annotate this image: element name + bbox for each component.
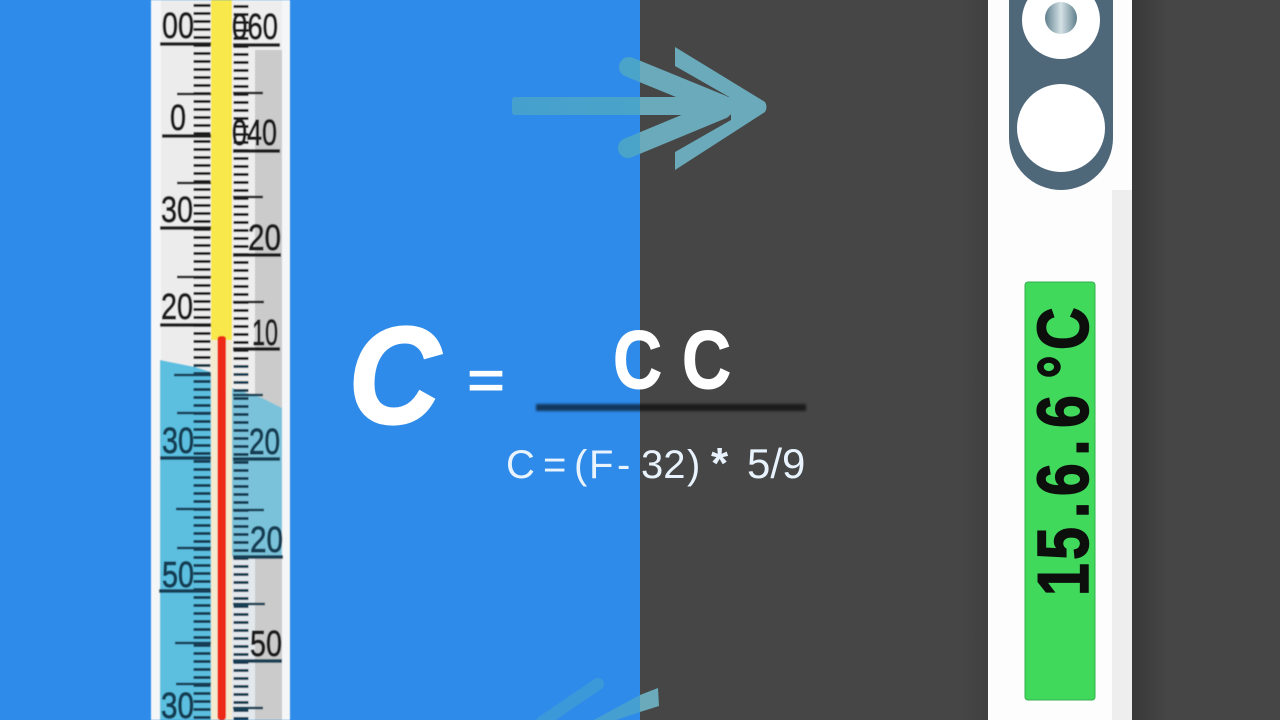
lower button [1017, 84, 1105, 172]
bottom arrow right stroke [590, 695, 640, 720]
left scale numbers: 20 [161, 286, 193, 327]
panel: blue left background [0, 0, 640, 720]
bottom arrow left stroke [542, 684, 598, 720]
scale left backing [161, 0, 211, 720]
formula text: * [711, 439, 729, 488]
arrow shaft [512, 97, 732, 115]
left scale numbers: 30 [161, 189, 193, 230]
scale grey band [255, 50, 282, 720]
panel: dark right background [640, 0, 1280, 720]
numerator letters: C [613, 314, 662, 407]
red mercury column [218, 336, 226, 720]
formula [348, 299, 806, 488]
big C variable: C [348, 299, 442, 453]
fraction bar [536, 404, 806, 411]
formula text: = [543, 443, 566, 487]
left scale numbers: 00 [162, 5, 194, 46]
arrow head [675, 47, 766, 170]
green display [1025, 282, 1095, 700]
lower right backing [232, 556, 255, 720]
scale right backing [232, 0, 282, 720]
left scale numbers: 30 [162, 420, 194, 461]
arrow lower inner arm [628, 109, 722, 148]
device right shade [1112, 190, 1132, 720]
arrow: bottom partial [542, 684, 659, 720]
formula text: - [617, 443, 630, 487]
water right [232, 388, 282, 556]
slate pill [1009, 0, 1113, 190]
left tick marks [159, 4, 211, 720]
left scale numbers: 0 [170, 97, 186, 138]
right scale numbers: 040 [232, 112, 277, 153]
right scale numbers [232, 6, 283, 664]
right scale numbers: 50 [250, 623, 282, 664]
equals sign: = [467, 352, 505, 410]
right scale numbers: 20 [248, 217, 281, 258]
numerator letters [613, 314, 731, 407]
lower tube [211, 340, 232, 720]
right scale numbers: 20 [249, 421, 280, 462]
bottom arrow tip [640, 688, 659, 712]
yellow tube [211, 0, 232, 340]
right tick marks [233, 5, 283, 720]
formula text: 5/9 [747, 440, 805, 487]
formula text: ) [687, 443, 700, 487]
formula text: 32 [641, 443, 686, 487]
right scale numbers: 10 [252, 312, 278, 353]
thermometer [151, 0, 290, 720]
right scale numbers: 20 [250, 519, 283, 560]
display reading: 15.6.6°C [1022, 307, 1103, 596]
numerator letters: C [682, 314, 731, 407]
device body [988, 0, 1132, 720]
device shadow right [1132, 0, 1168, 720]
arrow: top right-pointing [512, 47, 766, 170]
right scale numbers: 060 [232, 6, 278, 47]
digital thermometer [960, 0, 1168, 720]
left scale numbers: 50 [162, 554, 194, 595]
formula text: C [506, 443, 535, 487]
upper button pin [1045, 2, 1077, 34]
left scale numbers [161, 5, 194, 720]
upper button ring [1022, 0, 1100, 59]
arrow upper inner arm [629, 67, 722, 105]
formula text: F [589, 443, 613, 487]
water left [160, 360, 211, 720]
device shadow left [960, 0, 988, 720]
formula text: ( [574, 443, 588, 487]
thermometer body [151, 0, 290, 720]
